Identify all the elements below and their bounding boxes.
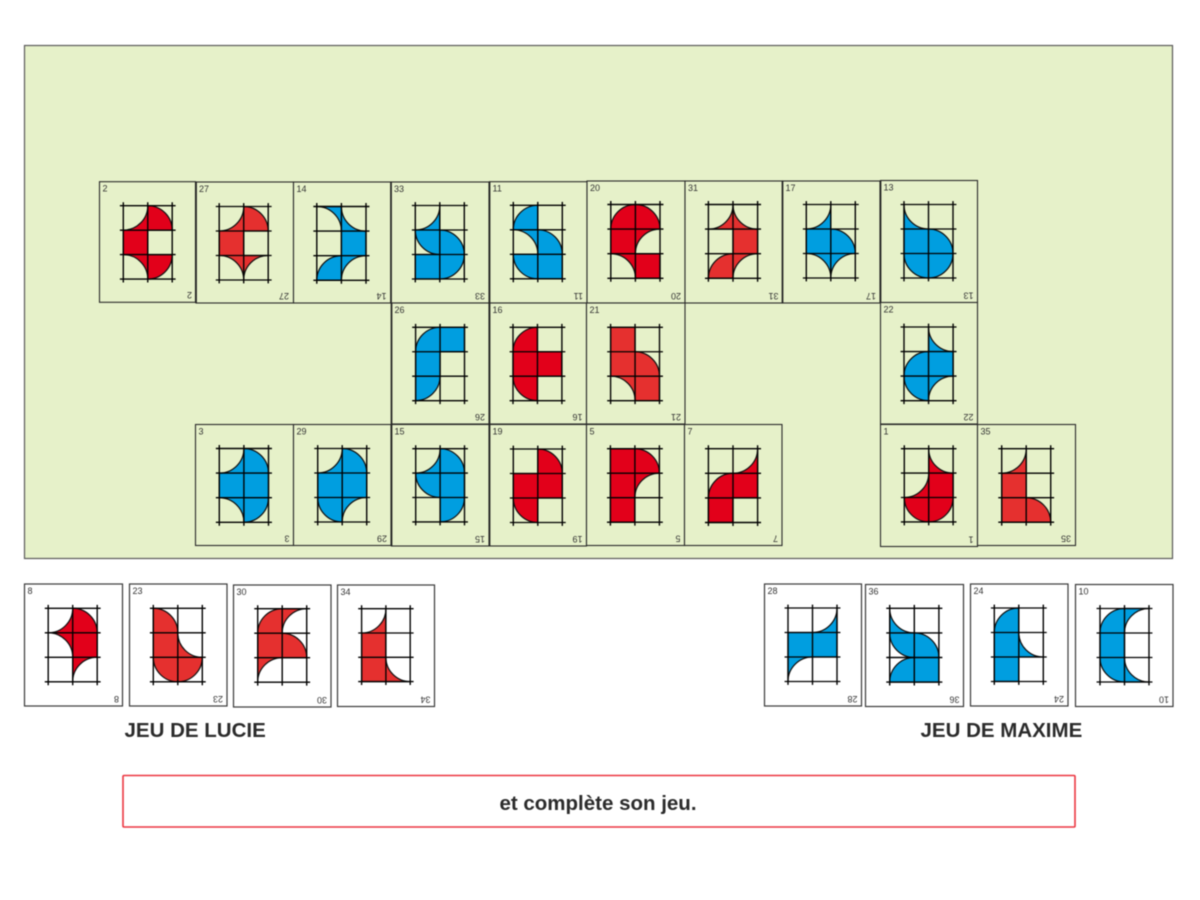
card 2: [100, 182, 196, 302]
card 5: 5: [590, 426, 595, 436]
card 21: 21: [671, 412, 681, 422]
heading: Maxime's hand: JEU DE MAXIME: [920, 719, 1082, 742]
card 22: 22: [884, 304, 894, 314]
card 31: 31: [768, 291, 778, 301]
card 13: 13: [884, 182, 894, 192]
card 3: 3: [284, 534, 290, 544]
card 29: [294, 424, 391, 546]
card 15: 15: [394, 426, 405, 436]
card 34: Lucie's hand: 34: [420, 694, 430, 704]
instruction box: et complète son jeu.: [499, 792, 697, 815]
card 14: 14: [296, 184, 307, 194]
card 20: [587, 181, 685, 303]
card 3: [196, 424, 294, 546]
card 29: 29: [377, 534, 387, 544]
card 35: [978, 424, 1076, 546]
card 35: 35: [1061, 534, 1071, 544]
card 17: [782, 181, 880, 303]
card 7: 7: [688, 426, 693, 436]
card 24: Maxime's hand: 24: [974, 586, 984, 596]
card 10: Maxime's hand: 10: [1159, 694, 1169, 704]
card 13: 13: [963, 290, 974, 300]
card 10: Maxime's hand: [1076, 584, 1173, 706]
card 33: [391, 182, 489, 303]
card 19: 19: [572, 534, 582, 544]
instruction box: [123, 776, 1075, 827]
card 8: Lucie's hand: 8: [114, 694, 119, 704]
card 8: Lucie's hand: [24, 584, 122, 706]
card 31: [685, 181, 782, 303]
card 33: 33: [394, 184, 404, 194]
card 1: 1: [884, 426, 889, 436]
card 8: Lucie's hand: 8: [28, 586, 33, 596]
card 28: Maxime's hand: 28: [768, 586, 778, 596]
card 14: 14: [376, 291, 386, 301]
card 21: [586, 303, 685, 424]
card 15: 15: [475, 534, 485, 544]
card 28: Maxime's hand: [764, 584, 862, 706]
card 2: 2: [102, 184, 108, 194]
card 16: [490, 303, 586, 424]
card 28: Maxime's hand: 28: [847, 694, 858, 704]
card 31: 31: [688, 183, 698, 193]
card 14: [294, 182, 391, 303]
card 11: 11: [492, 184, 502, 194]
card 36: Maxime's hand: 36: [949, 694, 960, 704]
card 20: 20: [590, 183, 600, 193]
card 33: 33: [475, 291, 485, 301]
card 11: [490, 182, 587, 303]
card 3: 3: [198, 426, 204, 436]
card 23: Lucie's hand: [130, 584, 227, 706]
card 19: [490, 424, 586, 546]
card 16: 16: [572, 412, 582, 422]
card 22: [880, 302, 978, 424]
card 7: [684, 424, 782, 546]
card 21: 21: [590, 305, 600, 315]
card 30: Lucie's hand: [234, 585, 331, 707]
panel: game board: [24, 46, 1172, 558]
card 23: Lucie's hand: 23: [213, 694, 223, 704]
card 36: Maxime's hand: 36: [868, 586, 879, 596]
card 30: Lucie's hand: 30: [236, 587, 247, 597]
card 13: [880, 180, 978, 302]
card 1: [880, 424, 978, 546]
card 23: Lucie's hand: 23: [132, 586, 143, 596]
card 17: 17: [786, 183, 796, 193]
card 10: Maxime's hand: 10: [1078, 586, 1089, 596]
card 36: Maxime's hand: [866, 584, 964, 706]
card 26: 26: [475, 412, 485, 422]
card 5: 5: [675, 534, 680, 544]
card 15: [392, 424, 489, 546]
heading: Lucie's hand: JEU DE LUCIE: [124, 719, 266, 742]
card 17: 17: [866, 291, 876, 301]
card 26: [392, 303, 489, 424]
card 29: 29: [296, 426, 307, 436]
card 2: 2: [187, 290, 192, 300]
card 27: 27: [279, 291, 289, 301]
card 16: 16: [492, 305, 503, 315]
card 7: 7: [773, 534, 778, 544]
card 20: 20: [671, 291, 681, 301]
card 30: Lucie's hand: 30: [317, 695, 327, 705]
card 5: [586, 424, 684, 546]
card 34: Lucie's hand: 34: [340, 587, 351, 597]
card 24: Maxime's hand: 24: [1054, 694, 1064, 704]
card 35: 35: [980, 426, 991, 436]
card 27: 27: [199, 184, 209, 194]
card 34: Lucie's hand: [338, 585, 434, 706]
card 1: 1: [968, 534, 974, 544]
card 24: Maxime's hand: [970, 584, 1068, 706]
card 22: 22: [963, 412, 974, 422]
card 19: 19: [492, 426, 503, 436]
card 11: 11: [574, 291, 583, 301]
card 26: 26: [394, 305, 405, 315]
card 27: [196, 182, 294, 303]
